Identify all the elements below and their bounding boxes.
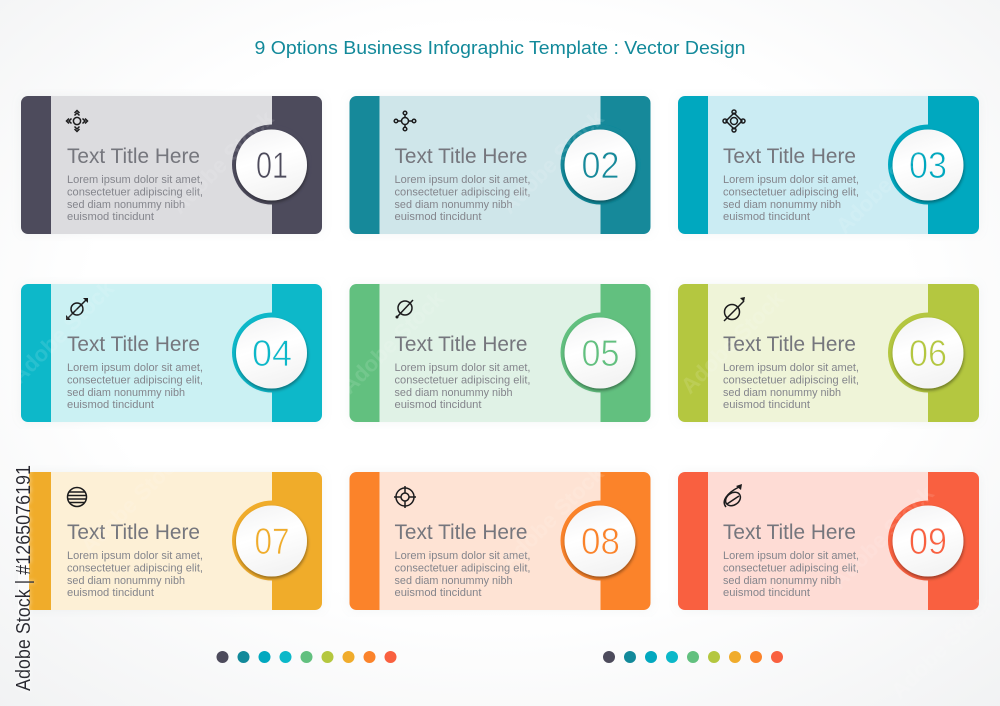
icon: diamond nodes [723,110,745,132]
icon: orbit with arrow [724,297,745,321]
panel: option 07 [21,472,322,610]
panel: option 03 [678,96,979,234]
panel: option 01: Lorem ipsum dolor sit amet, [67,174,203,186]
panel: option 03: consectetuer adipiscing elit, [723,186,859,198]
panel: option 04: Text Title Here [67,333,200,356]
panel: option 06: euismod tincidunt [723,399,810,411]
watermarks: Adobe Stock [826,480,939,594]
panel: option 02: euismod tincidunt [394,211,482,223]
panel: option 01: consectetuer adipiscing elit, [67,186,203,198]
panel: option 04: euismod tincidunt [67,399,154,411]
panel: option 09: euismod tincidunt [723,587,810,599]
panel: option 09: sed diam nonummy nibh [723,575,841,587]
icon: four-way arrows [66,110,88,132]
watermarks: Adobe Stock [76,445,189,559]
title: 9 Options Business Infographic Template : Vector Design [254,38,746,58]
halo behind stock id text [18,469,29,613]
panel: option 04: 04 [252,333,292,374]
panel: option 05: Lorem ipsum dolor sit amet, [394,362,530,374]
panel: option 02: consectetuer adipiscing elit, [394,186,530,198]
watermarks: Adobe Stock [676,285,789,399]
watermarks: Adobe Stock [6,275,119,389]
panel: option 03: Lorem ipsum dolor sit amet, [723,174,859,186]
icon: swirl orbit with arrow [723,484,743,509]
panel: option 06: sed diam nonummy nibh [723,387,841,399]
panel: option 08: sed diam nonummy nibh [394,575,512,587]
panel: option 04: sed diam nonummy nibh [67,387,185,399]
panel: option 07: Lorem ipsum dolor sit amet, [67,550,203,562]
watermarks: Adobe Stock [831,125,944,239]
panel: option 01: Text Title Here [67,145,200,168]
panel: option 01: 01 [256,145,288,186]
panel: option 01: euismod tincidunt [67,211,154,223]
panel: option 06 [678,284,979,422]
panel: option 02: 02 [582,145,620,186]
panel: option 05: sed diam nonummy nibh [394,387,512,399]
panel: option 07: consectetuer adipiscing elit, [67,562,203,574]
panel: option 04: consectetuer adipiscing elit, [67,374,203,386]
legend dots: left [216,651,396,663]
panel: option 09 [678,472,979,610]
panel: option 03: sed diam nonummy nibh [723,199,841,211]
panel: option 05: consectetuer adipiscing elit, [394,374,530,386]
panel: option 08: Text Title Here [394,521,528,544]
watermarks: Adobe Stock [496,460,609,574]
panel: option 07: Text Title Here [67,521,200,544]
panel: option 04: Lorem ipsum dolor sit amet, [67,362,203,374]
panel: option 09: Lorem ipsum dolor sit amet, [723,550,859,562]
panel: option 05: euismod tincidunt [394,399,482,411]
panel: option 06: Text Title Here [723,333,856,356]
watermarks: Adobe Stock [496,105,609,219]
icon: orbit [396,300,413,318]
panel: option 08 [350,472,650,610]
panel: option 05: 05 [582,333,620,374]
panel: option 03: 03 [909,145,947,186]
panel: option 02: Lorem ipsum dolor sit amet, [394,174,530,186]
panel: option 08: 08 [581,521,620,562]
panel: option 02: sed diam nonummy nibh [394,199,512,211]
panel: option 07: sed diam nonummy nibh [67,575,185,587]
icon: striped globe [68,488,86,506]
panel: option 03: Text Title Here [723,145,856,168]
legend dots: right [603,651,783,663]
panel: option 07: 07 [254,521,290,562]
panel: option 08: consectetuer adipiscing elit, [394,562,530,574]
panel: option 01 [21,96,322,234]
panel: option 02 [350,96,650,234]
panel: option 04 [21,284,322,422]
panel: option 03: euismod tincidunt [723,211,810,223]
panel: option 06: consectetuer adipiscing elit, [723,374,859,386]
panel: option 06: Lorem ipsum dolor sit amet, [723,362,859,374]
panel: option 09: Text Title Here [723,521,856,544]
icon: target ring [394,486,416,508]
panel: option 01: sed diam nonummy nibh [67,199,185,211]
icon: orbit with arrows [66,298,88,320]
icon: node cross [394,111,416,131]
panel: option 07: euismod tincidunt [67,587,154,599]
panel: option 05: Text Title Here [394,333,528,356]
panel: option 09: consectetuer adipiscing elit, [723,562,859,574]
watermarks: Adobe Stock [886,590,999,704]
watermarks: Adobe Stock [166,105,279,219]
panel: option 02: Text Title Here [394,145,528,168]
panel: option 05 [350,284,650,422]
panel: option 08: Lorem ipsum dolor sit amet, [394,550,530,562]
panel: option 09: 09 [909,521,947,562]
watermarks: Adobe Stock [336,285,449,399]
panel: option 06: 06 [909,333,947,374]
vertical stock id text: Adobe Stock | #1265076191 [13,465,35,691]
panel: option 08: euismod tincidunt [394,587,482,599]
